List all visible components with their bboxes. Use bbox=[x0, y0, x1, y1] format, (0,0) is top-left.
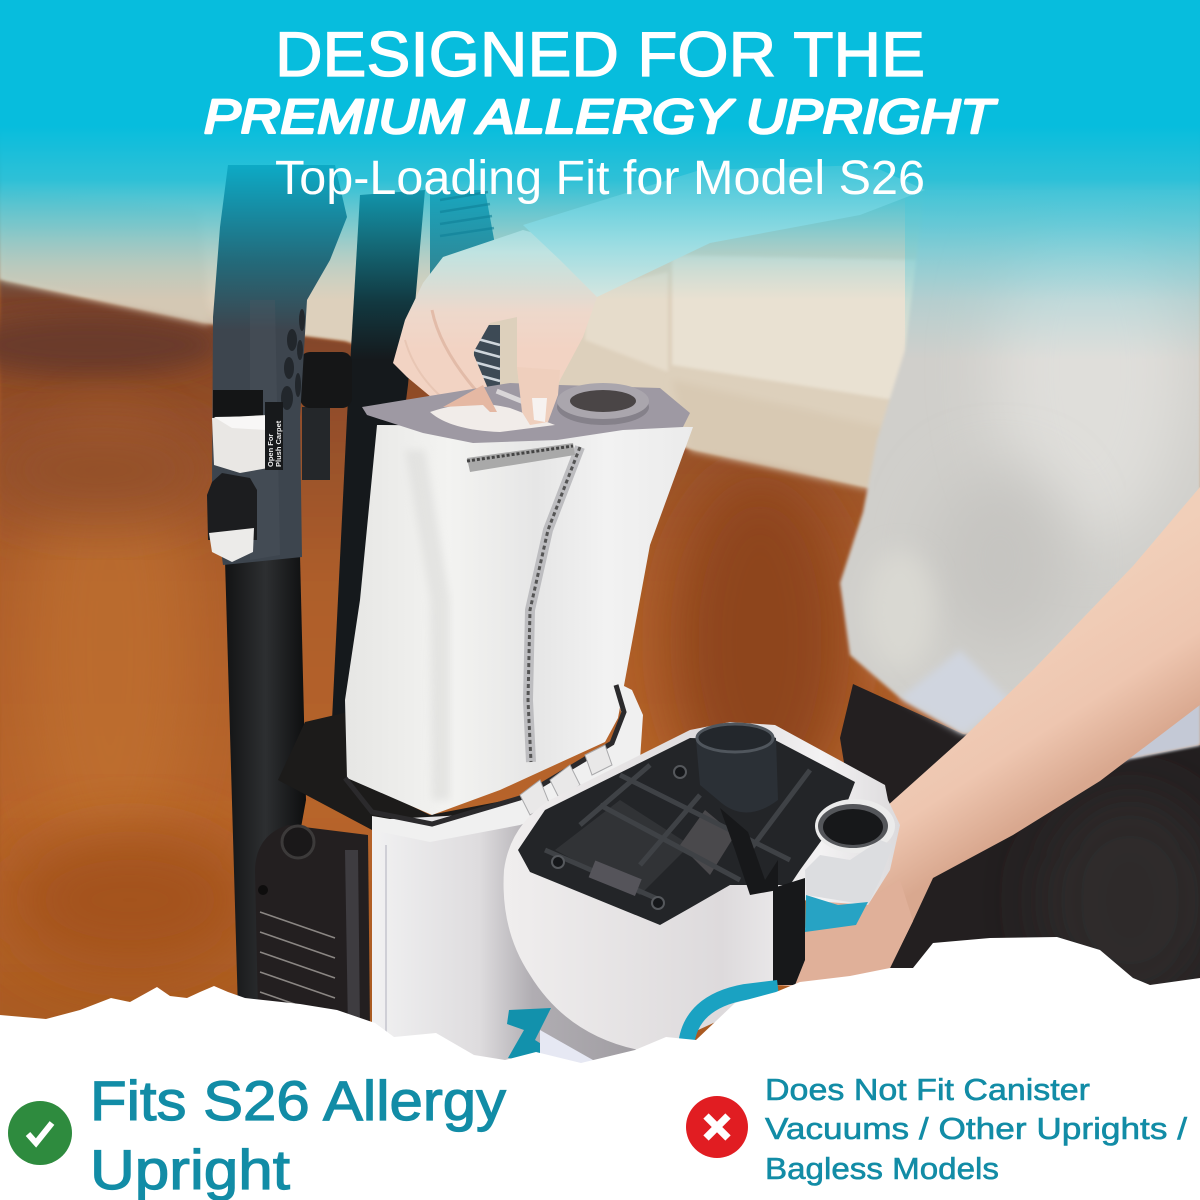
text: incompatible models: Does Not Fit Canister bbox=[765, 1072, 1090, 1107]
person: right forearm and hand holding the lid bbox=[775, 487, 1200, 990]
dark inner tray bbox=[518, 738, 855, 925]
torn paper footer panel bbox=[0, 937, 1200, 1200]
vacuum: pole bbox=[225, 555, 306, 1010]
teal band bbox=[805, 895, 868, 932]
vacuum: connector bracket bbox=[300, 352, 352, 480]
vacuum: hinge clips bbox=[520, 745, 612, 815]
does not fit callout bbox=[686, 1072, 1196, 1186]
person: upper arm reaching from the right bbox=[523, 165, 925, 297]
title block bbox=[204, 20, 998, 205]
vacuum: white body bbox=[372, 740, 640, 1064]
text: fits S26 allergy upright: Fits S26 Allergy bbox=[90, 1069, 506, 1132]
icon: green check bbox=[8, 1101, 72, 1165]
vacuum: open lid with dust cup bbox=[504, 722, 900, 1052]
label: open for plush carpet: Plush Carpet bbox=[274, 420, 283, 467]
latch bbox=[720, 808, 778, 895]
teal arc on lid bbox=[686, 988, 778, 1046]
label: open for plush carpet: Open For bbox=[266, 434, 275, 467]
vacuum: rear frame bbox=[278, 712, 560, 840]
text: incompatible models: Vacuums / Other Uprights / bbox=[765, 1111, 1187, 1146]
teal gradient header band bbox=[0, 0, 1200, 360]
subheading: model fit: Top-Loading Fit for Model S26 bbox=[275, 152, 925, 205]
vacuum: upright column behind the bag bbox=[332, 190, 425, 720]
filter bag bbox=[345, 425, 693, 815]
person: hand on the bag collar bbox=[393, 230, 597, 420]
person: dark trousers bbox=[840, 684, 1200, 1000]
heading: designed for the: DESIGNED FOR THE bbox=[275, 20, 925, 90]
heading: premium allergy upright: PREMIUM ALLERGY UPRIGHT bbox=[204, 91, 998, 144]
bag collar plate bbox=[362, 383, 690, 443]
black side strip bbox=[773, 878, 805, 985]
vacuum: hose bbox=[430, 190, 500, 390]
dust cup side bbox=[805, 840, 893, 905]
fits callout bbox=[8, 1069, 522, 1200]
person: grey shirt bbox=[840, 150, 1200, 770]
text: incompatible models: Bagless Models bbox=[765, 1151, 999, 1186]
nozzle bbox=[696, 724, 778, 812]
vacuum: gasket around the bag opening bbox=[345, 680, 643, 842]
round cup opening bbox=[815, 799, 895, 853]
person: thumb and finger over the collar bbox=[443, 367, 560, 425]
icon: red cross bbox=[686, 1096, 748, 1158]
logo mark on body bbox=[507, 1008, 551, 1062]
vacuum: handle grip bbox=[212, 165, 347, 565]
vacuum: motor housing panel bbox=[255, 825, 370, 1030]
label: open for plush carpet bbox=[265, 402, 283, 470]
text: fits S26 allergy upright: Upright bbox=[90, 1138, 290, 1200]
vacuum: white latch buttons and label bbox=[207, 390, 283, 562]
